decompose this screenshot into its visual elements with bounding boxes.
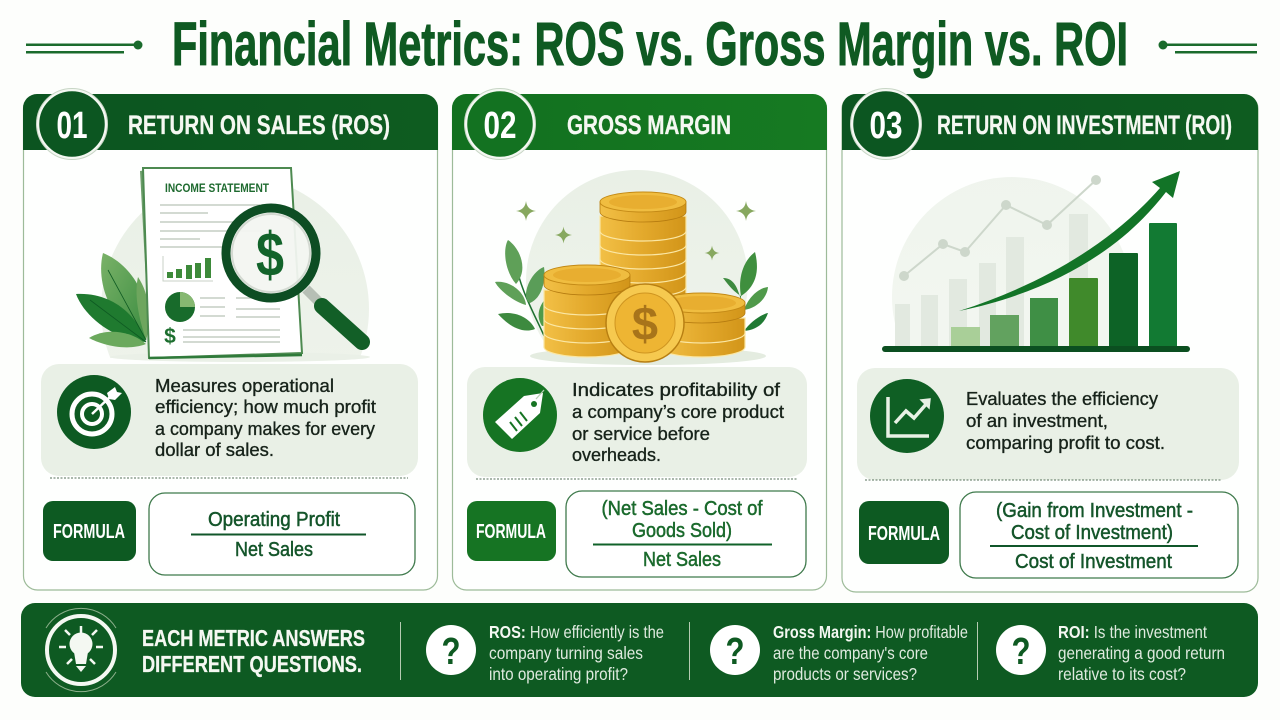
formula bbox=[566, 491, 806, 577]
formula label bbox=[43, 501, 136, 561]
left stack bbox=[544, 265, 630, 357]
description text bbox=[966, 388, 1165, 453]
background line bbox=[899, 175, 1101, 281]
description text: of an investment, bbox=[966, 410, 1108, 431]
illustration: income statement under magnifier bbox=[60, 168, 380, 443]
magnifier bbox=[226, 208, 362, 342]
formula: Net Sales bbox=[643, 548, 721, 571]
banner heading bbox=[142, 625, 365, 677]
magnifier: $ bbox=[256, 221, 284, 290]
question: gross margin: Gross Margin: How profitable bbox=[773, 622, 968, 642]
title ornament right bbox=[1158, 40, 1257, 54]
formula: (Net Sales - Cost of bbox=[602, 497, 763, 520]
right leaves bbox=[723, 252, 768, 331]
question: ROS: ? bbox=[442, 631, 460, 673]
description box bbox=[857, 368, 1239, 480]
formula label bbox=[467, 501, 556, 561]
panel header bbox=[842, 94, 1258, 150]
description box bbox=[41, 364, 418, 476]
big coin: $ bbox=[632, 297, 658, 350]
description text: Measures operational bbox=[155, 375, 334, 396]
formula bbox=[960, 492, 1238, 578]
description text bbox=[572, 379, 784, 465]
big coin bbox=[606, 284, 684, 362]
sparkles bbox=[516, 201, 756, 260]
question: gross margin bbox=[710, 622, 968, 684]
panel header bbox=[23, 94, 438, 150]
panel: gross margin bbox=[452, 88, 827, 590]
illustration: income statement under magnifier: INCOME STATEMENT bbox=[165, 183, 269, 195]
panel: return on sales bbox=[23, 88, 438, 590]
formula: Cost of Investment bbox=[1015, 550, 1172, 573]
tall stack bbox=[600, 192, 686, 353]
description text: Indicates profitability of bbox=[572, 379, 781, 400]
icon: price tag bbox=[483, 378, 557, 452]
description box bbox=[467, 367, 807, 477]
formula label: FORMULA bbox=[53, 521, 125, 543]
description text: a company’s core product bbox=[572, 401, 784, 422]
number badge 03: 03 bbox=[870, 105, 902, 147]
green bars bbox=[951, 223, 1177, 348]
leaves bbox=[76, 253, 149, 347]
description text: Evaluates the efficiency bbox=[966, 388, 1159, 409]
formula label: FORMULA bbox=[476, 521, 546, 543]
formula: (Gain from Investment - bbox=[996, 499, 1193, 522]
title ornament left bbox=[26, 40, 142, 54]
heading: GROSS MARGIN bbox=[567, 110, 731, 140]
question: ROS: company turning sales bbox=[489, 643, 643, 663]
question: ROI: relative to its cost? bbox=[1058, 664, 1186, 684]
icon: target bbox=[57, 375, 131, 449]
bottom banner bbox=[21, 603, 1258, 697]
panel: return on investment bbox=[842, 88, 1258, 592]
question: gross margin: products or services? bbox=[773, 664, 917, 684]
number badge 01 bbox=[36, 88, 108, 160]
panel frame bbox=[452, 95, 826, 590]
panel header bbox=[452, 94, 827, 150]
question: ROS: into operating profit? bbox=[489, 664, 628, 684]
question: ROI: ROI: Is the investment bbox=[1058, 622, 1207, 642]
illustration: income statement under magnifier: $ bbox=[164, 325, 176, 348]
right stack bbox=[659, 293, 745, 357]
bar chart with growth arrow bbox=[882, 171, 1195, 420]
formula: Goods Sold) bbox=[632, 519, 732, 542]
formula label bbox=[859, 501, 949, 564]
number badge 01: 01 bbox=[56, 105, 88, 147]
banner heading: EACH METRIC ANSWERS bbox=[142, 625, 365, 651]
question: ROS bbox=[426, 622, 664, 684]
panel frame bbox=[24, 95, 438, 590]
question: gross margin: are the company's core bbox=[773, 643, 928, 663]
description text: efficiency; how much profit bbox=[155, 396, 376, 417]
illustration: coin stacks bbox=[495, 170, 770, 392]
formula: Cost of Investment) bbox=[1011, 521, 1173, 544]
formula: Operating Profit bbox=[208, 508, 340, 531]
background bars bbox=[895, 214, 1088, 348]
pie chart bbox=[165, 292, 195, 322]
formula bbox=[149, 493, 415, 575]
formula: Net Sales bbox=[235, 538, 313, 561]
panel frame bbox=[842, 95, 1258, 592]
description text: comparing profit to cost. bbox=[966, 432, 1165, 453]
document bbox=[140, 170, 156, 358]
formula label: FORMULA bbox=[868, 523, 940, 545]
heading: RETURN ON SALES (ROS) bbox=[128, 110, 390, 140]
number badge 03 bbox=[850, 88, 922, 160]
description text: or service before bbox=[572, 423, 710, 444]
description text: overheads. bbox=[572, 444, 661, 465]
banner heading: DIFFERENT QUESTIONS. bbox=[142, 651, 362, 677]
question: ROI: ? bbox=[1012, 631, 1030, 673]
number badge 02 bbox=[464, 88, 536, 160]
icon: line chart bbox=[870, 379, 944, 453]
icon: lightbulb bbox=[46, 608, 116, 692]
description text: a company makes for every bbox=[155, 418, 376, 439]
left leaves bbox=[495, 240, 552, 338]
question: ROI bbox=[996, 622, 1225, 684]
number badge 02: 02 bbox=[484, 105, 516, 147]
growth arrow bbox=[959, 171, 1180, 311]
question: gross margin: ? bbox=[726, 631, 744, 673]
question: ROI: generating a good return bbox=[1058, 643, 1225, 663]
description text: dollar of sales. bbox=[155, 439, 274, 460]
axis bbox=[882, 346, 1190, 352]
question: ROS: ROS: How efficiently is the bbox=[489, 622, 664, 642]
description text bbox=[155, 375, 376, 460]
